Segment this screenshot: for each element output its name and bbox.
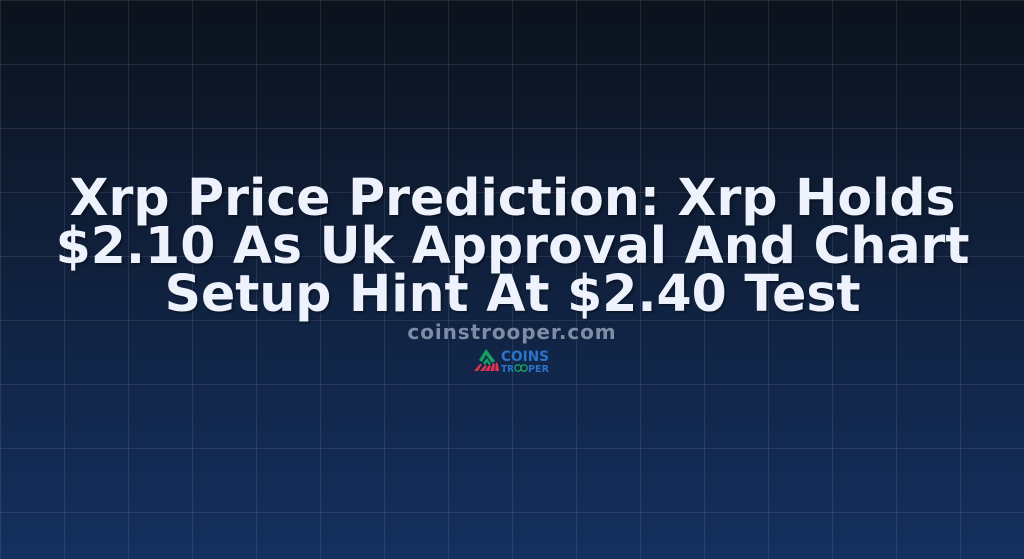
- icon: coinstrooper logo: PER: [528, 364, 549, 375]
- icon: coinstrooper logo: COINS: [501, 349, 549, 365]
- title: Xrp Price Prediction: Xrp Holds: [70, 168, 956, 227]
- title: $2.10 As Uk Approval And Chart: [56, 216, 970, 275]
- title: [56, 168, 970, 324]
- title: Setup Hint At $2.40 Test: [165, 264, 861, 323]
- icon: coinstrooper logo: [474, 349, 549, 375]
- site name: coinstrooper.com: [407, 320, 617, 344]
- icon: coinstrooper logo: TR: [501, 364, 514, 375]
